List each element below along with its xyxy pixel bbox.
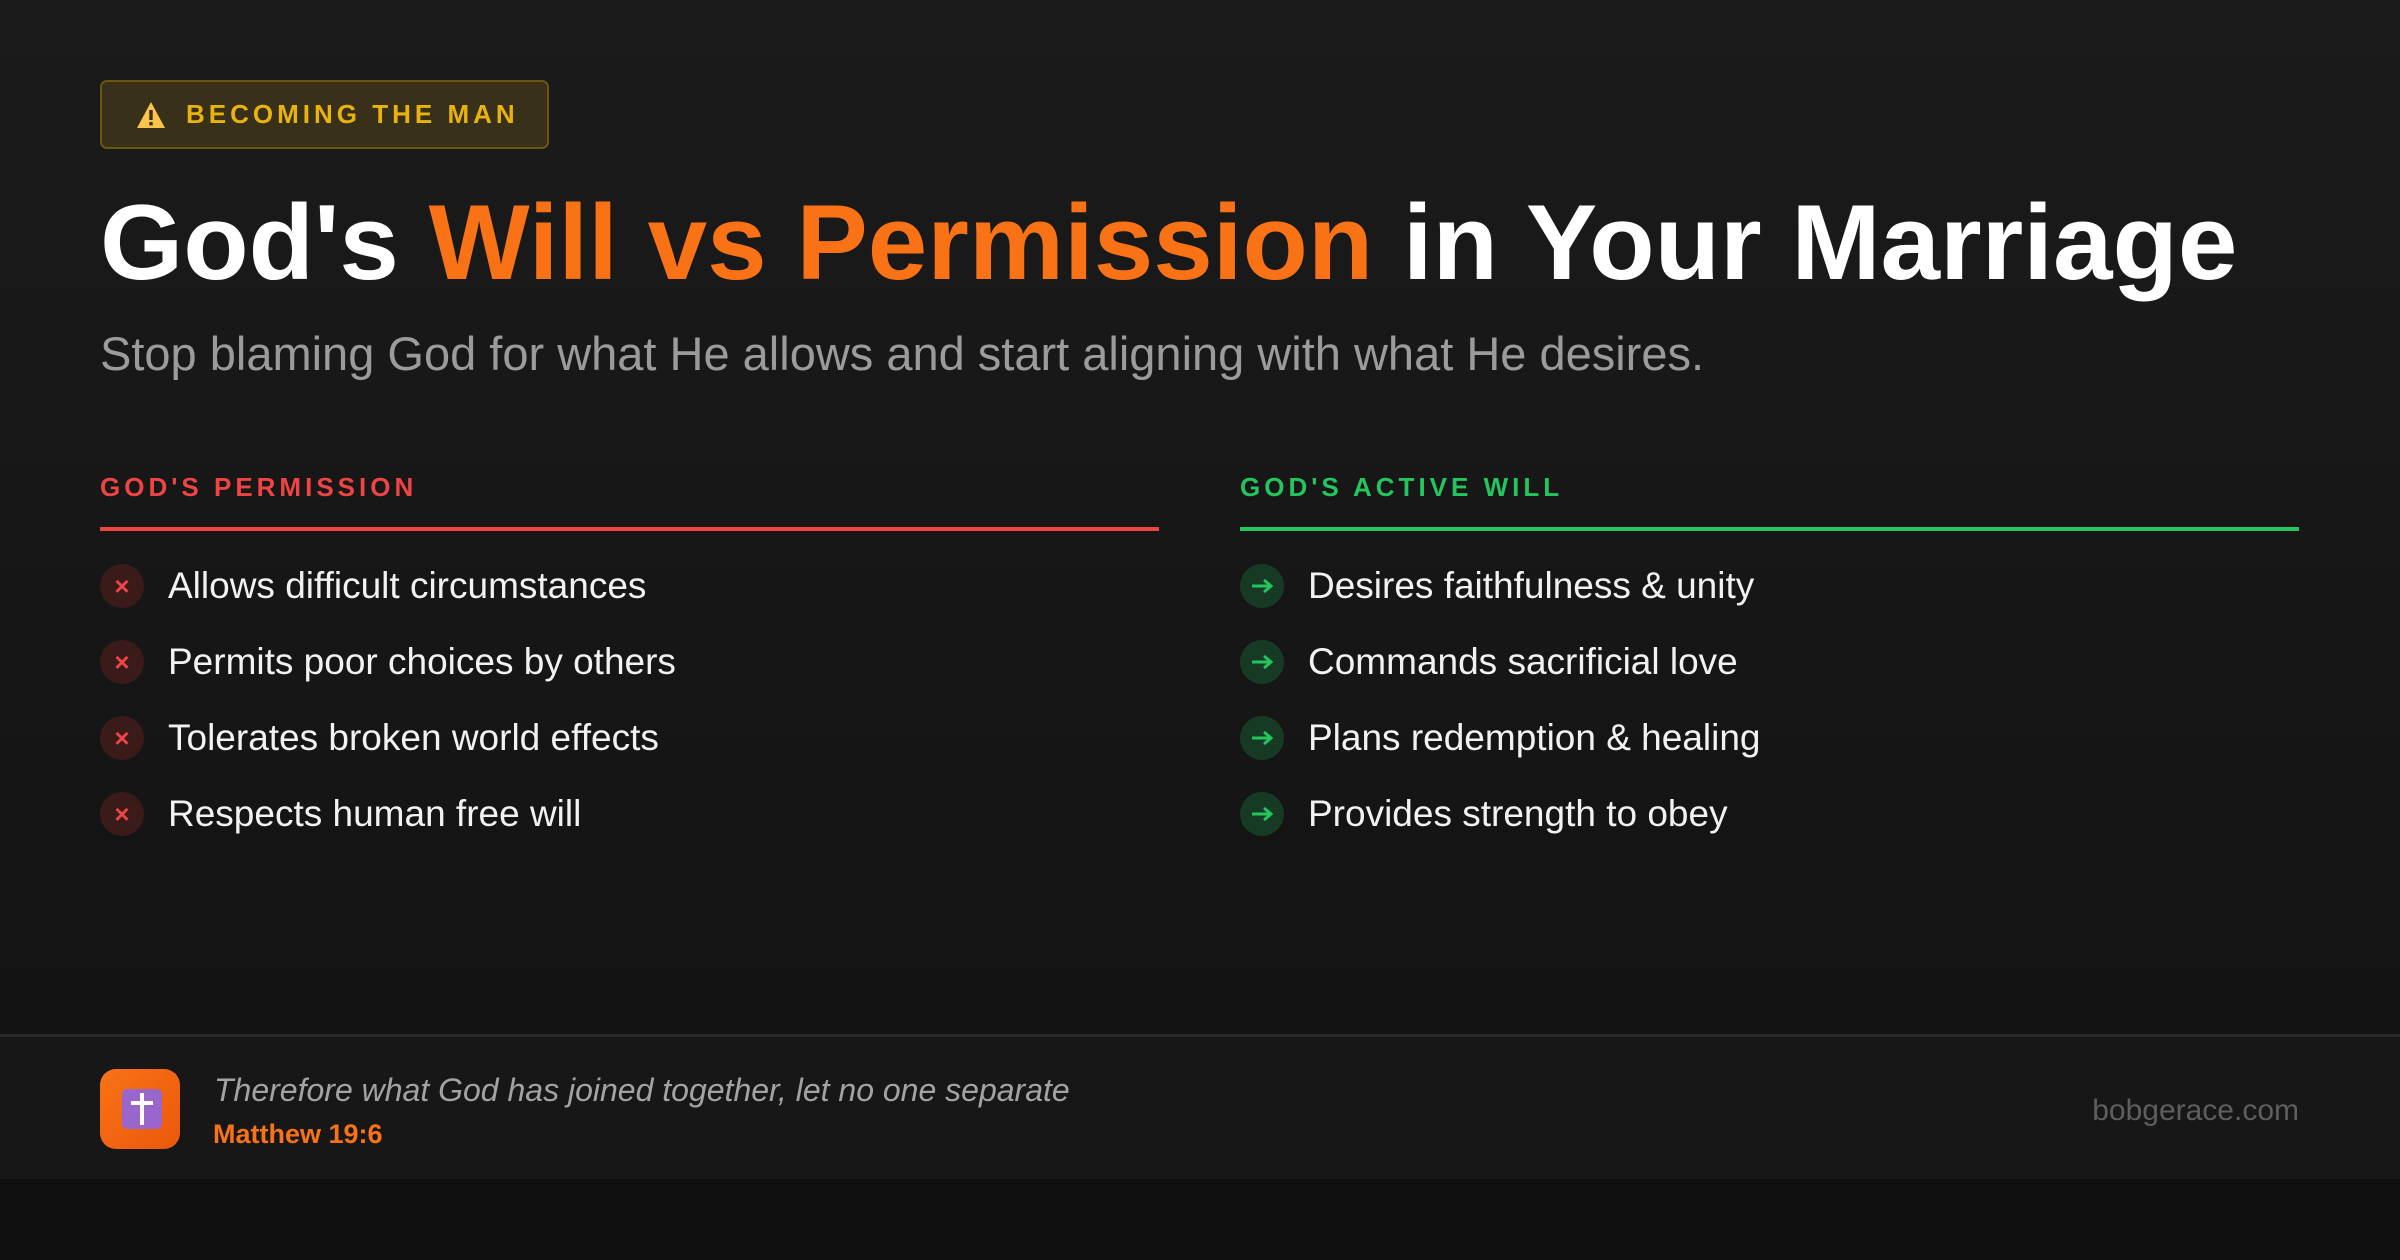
- panel: permission: [100, 472, 1159, 836]
- item 1: Desires faithfulness & unity: [1308, 565, 1754, 606]
- item 2: Permits poor choices by others: [168, 641, 676, 682]
- item 4: ×: [114, 798, 130, 828]
- panel: active will: [1240, 472, 2299, 836]
- icon: cross: [100, 1069, 180, 1149]
- item 3: ×: [114, 722, 130, 752]
- item 2: Commands sacrificial love: [1308, 641, 1738, 682]
- item 4: Provides strength to obey: [1308, 793, 1728, 834]
- item 3: Tolerates broken world effects: [168, 717, 659, 758]
- title: God's Will vs Permission in Your Marriage: [100, 182, 2237, 302]
- heading: permission: GOD'S PERMISSION: [100, 472, 417, 502]
- website: bobgerace.com: [2092, 1094, 2299, 1127]
- item 1: ×: [114, 570, 130, 600]
- item 1: Allows difficult circumstances: [168, 565, 646, 606]
- reference: Matthew 19:6: [213, 1119, 383, 1149]
- footer: [0, 1034, 2400, 1179]
- heading: active will: GOD'S ACTIVE WILL: [1240, 472, 1563, 502]
- subtitle: Stop blaming God for what He allows and start aligning with what He desires.: [100, 327, 1704, 380]
- item 3: Plans redemption & healing: [1308, 717, 1761, 758]
- badge: BECOMING THE MAN: [186, 99, 519, 129]
- item 2: ×: [114, 646, 130, 676]
- badge: [100, 80, 549, 149]
- quote: Therefore what God has joined together, let no one separate: [214, 1072, 1070, 1108]
- item 4: Respects human free will: [168, 793, 581, 834]
